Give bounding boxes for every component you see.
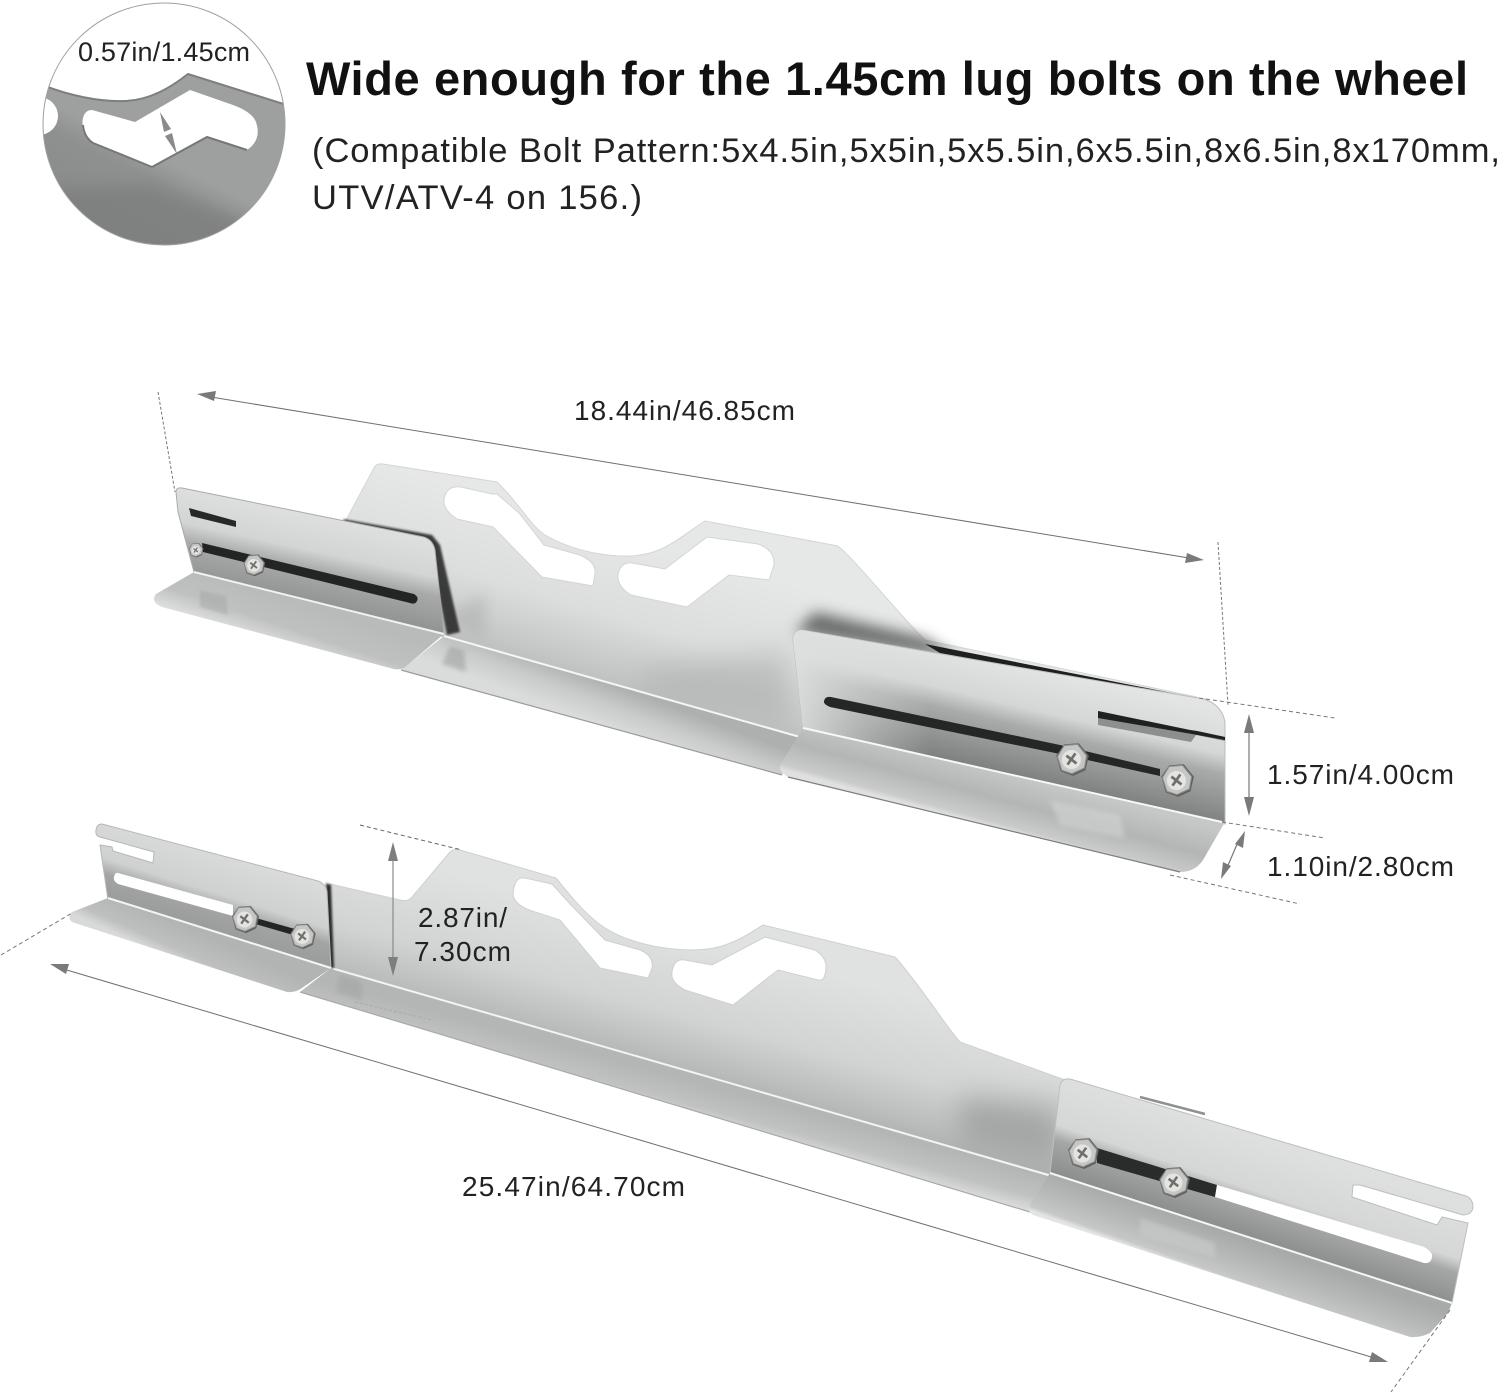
light fade at the left of the right panel <box>793 630 930 757</box>
text block: compatible bolt patterns <box>312 132 1500 217</box>
label: plate height: 2.87in/ <box>418 902 507 933</box>
right panel bolts <box>1068 1138 1190 1198</box>
label: plate height <box>414 902 511 967</box>
dimension: plate height <box>360 825 511 976</box>
label: extended length: 25.47in/64.70cm <box>462 1171 685 1202</box>
main bottom flange <box>300 968 1055 1212</box>
dimension: overall extended length <box>1 913 1450 1392</box>
magnified plate with slot <box>44 75 284 244</box>
left slider panel <box>154 488 444 670</box>
soft shading on main plate <box>447 592 790 725</box>
label: plate height: 7.30cm <box>414 936 511 967</box>
text block: compatible bolt patterns: UTV/ATV-4 on 156.) <box>312 179 642 217</box>
heading: Wide enough for the 1.45cm lug bolts on the wheel <box>306 52 1468 105</box>
left slider panel <box>70 824 331 992</box>
label: flange depth: 1.10in/2.80cm <box>1267 851 1454 882</box>
label: slot width: 0.57in/1.45cm <box>78 37 250 67</box>
dimension: overall retracted length <box>158 391 1228 705</box>
left panel bolts <box>189 543 265 576</box>
label: retracted length: 18.44in/46.85cm <box>574 395 795 426</box>
callout: magnified lug slot circle <box>42 2 286 246</box>
right panel slots <box>1097 1148 1217 1197</box>
main upright plate with bolt holes <box>345 464 1225 822</box>
label: side height: 1.57in/4.00cm <box>1267 759 1454 790</box>
right panel bolts <box>1056 743 1194 797</box>
left panel flange <box>154 572 444 670</box>
right panel flange <box>780 728 1225 872</box>
main bottom flange <box>401 636 803 775</box>
left panel flange <box>70 898 331 992</box>
left panel slots <box>114 873 233 916</box>
faint stamped line on flange <box>355 1002 432 1020</box>
shadow behind right panel <box>795 612 1203 702</box>
right slider panel <box>1029 1079 1473 1337</box>
left panel bolts <box>232 906 316 949</box>
right panel slots <box>824 697 1160 776</box>
shadow behind left panel <box>343 519 460 635</box>
left panel slots <box>189 508 236 527</box>
right slider panel <box>780 630 1225 872</box>
right panel flange <box>1029 1173 1452 1337</box>
back plate sliver <box>1140 1097 1205 1114</box>
bracket: extended position (bottom) <box>70 824 1473 1337</box>
bracket: retracted position (top) <box>154 464 1225 872</box>
main upright plate with bolt holes <box>330 849 1065 1180</box>
dark gap at left panel <box>326 883 334 968</box>
soft shading on main plate <box>960 1095 1062 1165</box>
dimension: side height <box>1199 698 1454 838</box>
text block: compatible bolt patterns: (Compatible Bolt Pattern:5x4.5in,5x5in,5x5.5in,6x5.5in,8x6.5in,8x170mm, <box>312 132 1500 170</box>
dimension: flange depth <box>1170 831 1454 904</box>
arrow: slot width <box>160 112 177 154</box>
